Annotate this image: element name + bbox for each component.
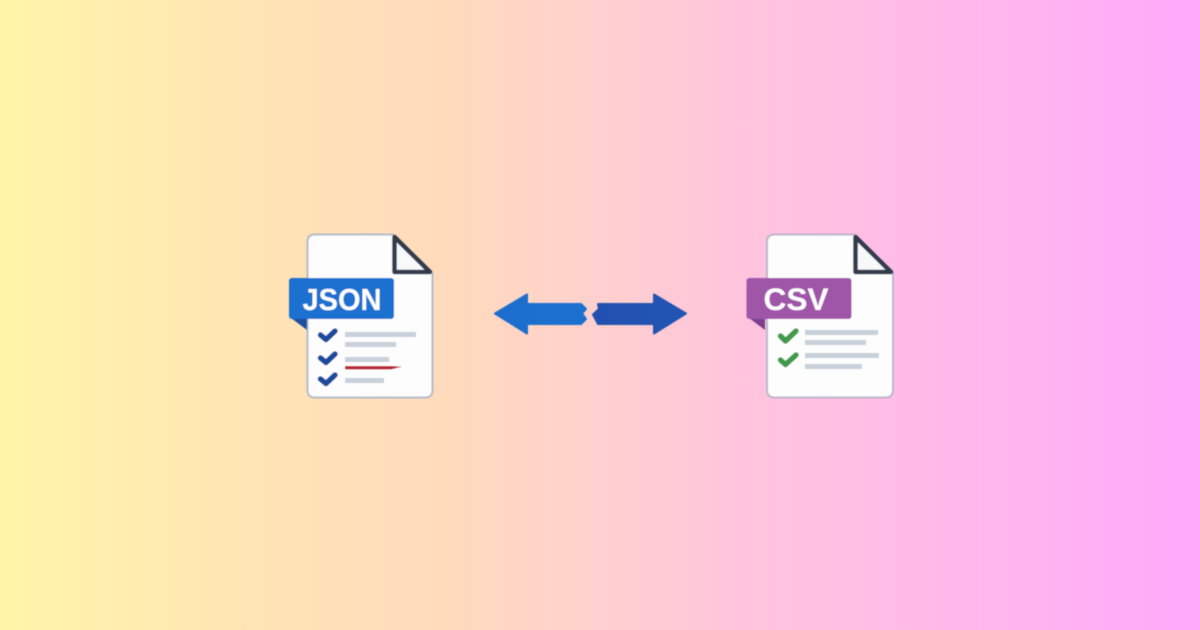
checkmarks [780,331,796,364]
folded corner [856,237,891,272]
label: JSON: JSON [302,283,382,317]
document page [308,234,432,398]
right arrow [593,294,686,334]
text lines [345,332,416,383]
document page [767,234,893,398]
label: JSON [289,278,394,319]
checkmarks [320,331,335,384]
label tail [291,318,307,330]
icon: CSV document [746,234,893,398]
label: CSV: CSV [764,281,828,317]
label tail [749,318,765,330]
left arrow [495,294,586,334]
icon: JSON document [289,234,432,398]
icon: double arrow [495,294,686,334]
text lines [805,330,879,369]
folded corner [394,237,430,272]
label: CSV [746,278,852,319]
red underline [345,366,402,370]
